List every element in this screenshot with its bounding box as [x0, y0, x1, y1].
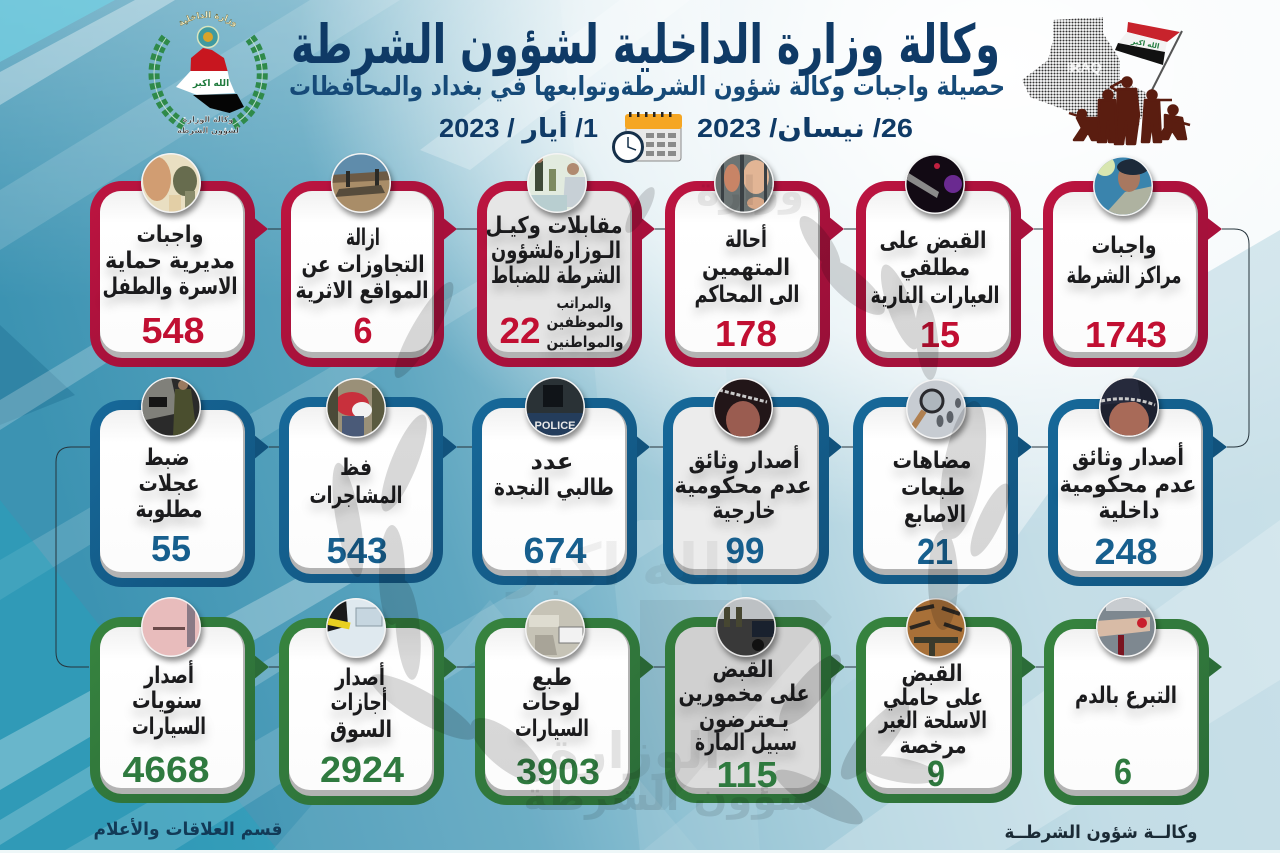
panel: wanted vehicles seized: عجلات [138, 471, 200, 497]
panel: family and child protection directorate: الاسرة والطفل [102, 274, 238, 300]
panel: market permits issued: 2924 [320, 749, 404, 790]
panel: domestic non-conviction documents: عدم محكومية [1060, 472, 1196, 498]
panel: fingerprint matching: الاصابع [904, 502, 966, 528]
panel: domestic non-conviction documents: داخلية [1098, 498, 1160, 524]
panel: car plates printed: 3903 [516, 751, 600, 792]
icon: hand shadow photo [141, 153, 201, 213]
panel: drunk persons blocking passers-by arrested: 115 [716, 754, 778, 795]
header logo: ministry wreath emblem [148, 11, 268, 136]
icon: driving licence photo [326, 598, 386, 658]
iraq dotted map with flag and soldiers: الله اكبر [1130, 37, 1160, 51]
panel: unlicensed weapon carriers arrested: على حاملي [883, 685, 983, 711]
panel: removing encroachments on archaeological sites [281, 153, 457, 367]
panel: family and child protection directorate: مديرية حماية [105, 248, 235, 274]
panel: car plates printed: طبع [532, 665, 572, 691]
panel: annual car registrations: السيارات [132, 714, 206, 740]
panel: firearm shooters arrested: القبض على [880, 228, 986, 254]
panel: blood donation [1044, 597, 1222, 805]
panel: wanted vehicles seized: 55 [151, 528, 191, 569]
panel: annual car registrations: سنويات [132, 688, 202, 714]
panel: distress callers [472, 377, 650, 585]
panel: police stations duties: مراكز الشرطة [1066, 263, 1182, 289]
header logo: ministry wreath emblem: وكالة الوزارة [183, 115, 233, 124]
panel: removing encroachments on archaeological sites: المواقع الاثرية [296, 278, 428, 304]
icon: police patrol photo [716, 597, 776, 657]
panel: fingerprint matching [853, 379, 1032, 584]
subtitle: حصيلة واجبات وكالة شؤون الشرطةوتوابعها في بغداد والمحافظات [289, 72, 1005, 102]
panel: family and child protection directorate: واجبات [136, 222, 204, 248]
panel: drunk persons blocking passers-by arrested: سبيل المارة [695, 730, 797, 756]
panel: breaking up fights [279, 378, 457, 583]
panel: unlicensed weapon carriers arrested: القبض [902, 661, 962, 687]
header logo: ministry wreath emblem: لشؤون الشرطة [177, 126, 239, 135]
panel: distress callers: 674 [524, 530, 586, 571]
panel: distress callers: طالبي النجدة [494, 475, 614, 501]
panel: car plates printed [475, 599, 654, 805]
panel: foreign non-conviction documents: 99 [726, 530, 764, 571]
panel: police stations duties: واجبات [1092, 233, 1156, 259]
panel: undersecretary interviews: والمواطنين [546, 333, 624, 351]
panel: wanted vehicles seized: ضبط [144, 445, 190, 471]
panel: foreign non-conviction documents [663, 378, 842, 584]
icon: registration document photo [141, 597, 201, 657]
watermark: الله اكبر [505, 531, 742, 600]
connector lines [56, 229, 1249, 667]
panel: foreign non-conviction documents: أصدار وثائق [688, 444, 800, 474]
panel: family and child protection directorate: 548 [142, 310, 204, 351]
panel: breaking up fights: المشاجرات [310, 483, 402, 509]
date from: 26/ نيسان/ 2023 [697, 113, 913, 143]
panel: unlicensed weapon carriers arrested: مرخصة [900, 733, 966, 759]
panel: annual car registrations [90, 597, 269, 803]
panel: police stations duties [1043, 156, 1222, 367]
panel: undersecretary interviews: والموظفين [546, 313, 624, 331]
panel: drunk persons blocking passers-by arrested: على مخمورين [678, 681, 810, 707]
watermark: وزارة [696, 169, 804, 215]
panel: annual car registrations: أصدار [143, 659, 194, 689]
panel: annual car registrations: 4668 [122, 749, 210, 790]
icon: officer photo [1093, 156, 1153, 216]
icon: gun at night photo [905, 154, 965, 214]
panel: firearm shooters arrested: 15 [920, 314, 960, 355]
date to: 1/ أيار / 2023 [439, 111, 598, 143]
panel: undersecretary interviews: الـوزارةلشؤون [491, 238, 621, 264]
panel: foreign non-conviction documents: خارجية [712, 498, 776, 524]
panel: removing encroachments on archaeological sites: 6 [354, 310, 372, 351]
panel: unlicensed weapon carriers arrested: الاسلحة الغير [878, 708, 987, 734]
panel: undersecretary interviews: والمراتب [556, 294, 612, 312]
panel: market permits issued: أجازات [330, 686, 388, 716]
panel: unlicensed weapon carriers arrested: 9 [927, 753, 945, 794]
panel: undersecretary interviews: مقابلات وكيـل [486, 213, 622, 239]
panel: suspects referred to courts: أحالة [725, 223, 767, 253]
icon: jail bars photo [714, 153, 774, 213]
iraq dotted map with flag and soldiers: IRAQ [1066, 59, 1102, 75]
iraq dotted map with flag and soldiers [1022, 17, 1190, 144]
panel: market permits issued [279, 598, 457, 805]
panel: domestic non-conviction documents [1048, 377, 1227, 586]
icon: handcuffs photo [713, 378, 773, 439]
icon: calendar and clock [614, 112, 682, 162]
panel: family and child protection directorate [90, 153, 268, 367]
panel: fingerprint matching: 21 [917, 531, 953, 572]
panel: wanted vehicles seized [90, 377, 269, 587]
watermark: شؤون الشرطة [523, 774, 817, 820]
panel: suspects referred to courts: الى المحاكم [694, 282, 800, 308]
footer: police affairs agency: وكالــة شؤون الشرطــة [1004, 822, 1198, 843]
panel: car plates printed: لوحات [522, 690, 580, 716]
panel: firearm shooters arrested [856, 154, 1034, 367]
icon: blood donor photo [1096, 597, 1156, 657]
panel: market permits issued: السوق [330, 717, 392, 743]
header logo: ministry wreath emblem: الله اكبر [192, 79, 229, 89]
header logo: ministry wreath emblem: وزارة الداخلية [179, 11, 236, 27]
footer: relations and media department: قسم العلاقات والأعلام [94, 818, 282, 840]
panel: suspects referred to courts [665, 153, 844, 367]
icon: police car photo: POLICE [535, 420, 575, 432]
panel: distress callers: عدد [530, 449, 574, 475]
icon: arrest photo [326, 378, 386, 438]
icon: seized guns photo [906, 598, 966, 658]
panel: car plates printed: السيارات [515, 716, 589, 742]
panel: market permits issued: أصدار [334, 661, 385, 691]
icon: magnifier fingerprints photo [906, 379, 966, 439]
icon: handcuffs photo [1099, 377, 1159, 441]
panel: police stations duties: 1743 [1085, 314, 1167, 355]
title: وكالة وزارة الداخلية لشؤون الشرطة [291, 13, 1000, 76]
icon: police car photo [525, 377, 585, 437]
panel: drunk persons blocking passers-by arrested: القبض [712, 657, 774, 683]
icon: meeting photo [527, 153, 587, 213]
watermark: الوزارة [549, 722, 721, 781]
panel: foreign non-conviction documents: عدم محكومية [674, 473, 812, 499]
panel: suspects referred to courts: المتهمين [702, 255, 790, 281]
panel: blood donation: 6 [1114, 751, 1132, 792]
panel: domestic non-conviction documents: أصدار وثائق [1072, 441, 1184, 471]
icon: plates photo [525, 599, 585, 659]
panel: drunk persons blocking passers-by arrested [665, 597, 845, 803]
panel: fingerprint matching: مضاهات [892, 448, 972, 474]
panel: domestic non-conviction documents: 248 [1094, 531, 1158, 572]
panel: breaking up fights: فظ [340, 455, 372, 481]
panel: firearm shooters arrested: العيارات النارية [870, 283, 1000, 309]
panel: suspects referred to courts: 178 [715, 313, 777, 354]
panel: removing encroachments on archaeological sites: التجاوزات عن [302, 252, 424, 278]
panel: firearm shooters arrested: مطلقي [900, 255, 970, 281]
panel: breaking up fights: 543 [326, 530, 388, 571]
panel: removing encroachments on archaeological sites: ازالة [346, 225, 380, 251]
panel: blood donation: التبرع بالدم [1075, 683, 1177, 709]
panel: wanted vehicles seized: مطلوبة [136, 497, 202, 523]
panel: drunk persons blocking passers-by arrested: يـعترضون [699, 707, 789, 733]
panel: undersecretary interviews [477, 153, 655, 367]
icon: vehicle check photo [141, 377, 201, 437]
panel: undersecretary interviews: 22 [500, 310, 540, 351]
watermark [326, 169, 1017, 833]
icon: ruins photo [331, 153, 391, 213]
panel: unlicensed weapon carriers arrested [856, 598, 1036, 803]
panel: fingerprint matching: طبعات [901, 475, 965, 501]
panel: undersecretary interviews: الشرطة للضباط [491, 263, 621, 289]
